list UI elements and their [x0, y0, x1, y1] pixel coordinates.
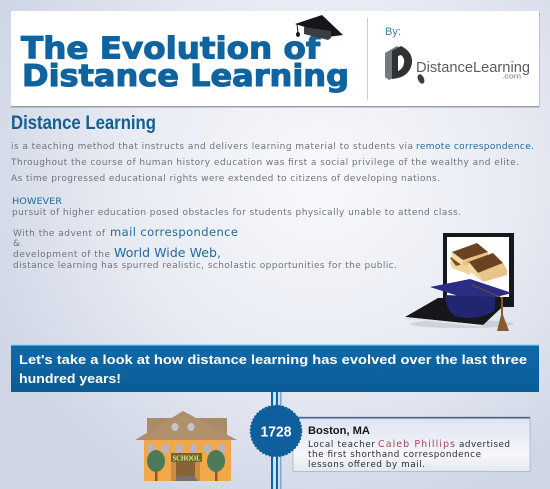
card: Boston, MA: advertised: [459, 440, 510, 450]
text block: however: [12, 197, 461, 218]
text block: definition: As time progressed educational rights were extended to citizens of developing nations.: [11, 174, 440, 184]
text block: however: pursuit of higher education posed obstacles for students physically unable to attend class.: [12, 208, 461, 218]
text block: advent: mail correspondence: [110, 225, 238, 239]
laptop base: [405, 297, 513, 325]
books: [450, 243, 507, 282]
mortarboard: [430, 279, 512, 302]
card: Boston, MA: Caleb Phillips: [378, 439, 455, 450]
text block: definition: is a teaching method that instructs and delivers learning material to students via: [11, 142, 413, 152]
title: The Evolution of: [21, 32, 321, 66]
banner: hundred years!: [19, 371, 121, 386]
text block: advent: World Wide Web,: [114, 245, 221, 260]
title: [21, 32, 349, 94]
heading: Distance Learning: Distance Learning: [11, 113, 156, 134]
text block: definition: Throughout the course of human history education was first a social privilege of the wealthy and elite.: [10, 158, 519, 168]
text block: advent: [13, 225, 397, 271]
year badge: 1728: [250, 406, 302, 456]
text block: advent: With the advent of: [13, 229, 106, 239]
card: Boston, MA: [293, 417, 530, 472]
text block: advent: &: [13, 239, 20, 249]
card: Boston, MA: the first shorthand correspondence: [308, 450, 481, 460]
year badge: 1728: 1728: [260, 424, 292, 440]
panel: header: [11, 11, 540, 108]
banner: [11, 344, 539, 392]
logo: DistanceLearning.com: DistanceLearning: [416, 59, 530, 76]
text block: definition: remote correspondence.: [416, 142, 534, 152]
text block: advent: distance learning has spurred realistic, scholastic opportunities for the public.: [13, 261, 397, 271]
icon: school building: SCHOOL: [172, 454, 200, 462]
byline: By:: [385, 26, 401, 38]
timeline line: [271, 391, 282, 489]
text block: however: HOWEVER: [12, 197, 62, 207]
laptop screen: [443, 233, 514, 307]
card: Boston, MA: lessons offered by mail.: [308, 460, 425, 470]
logo: DistanceLearning.com: [385, 46, 530, 85]
card: Boston, MA: Boston, MA: [308, 425, 370, 437]
banner: Let's take a look at how distance learning has evolved over the last three: [19, 352, 527, 367]
icon: graduation cap: [295, 15, 343, 40]
text block: advent: development of the: [13, 250, 110, 260]
icon: laptop with books and graduation cap: [405, 233, 514, 331]
text block: definition: [10, 142, 534, 184]
icon: school building: [135, 411, 237, 481]
card: Boston, MA: Local teacher: [308, 440, 375, 450]
title: Distance Learning: [22, 59, 349, 94]
logo: DistanceLearning.com: .com: [502, 74, 521, 80]
